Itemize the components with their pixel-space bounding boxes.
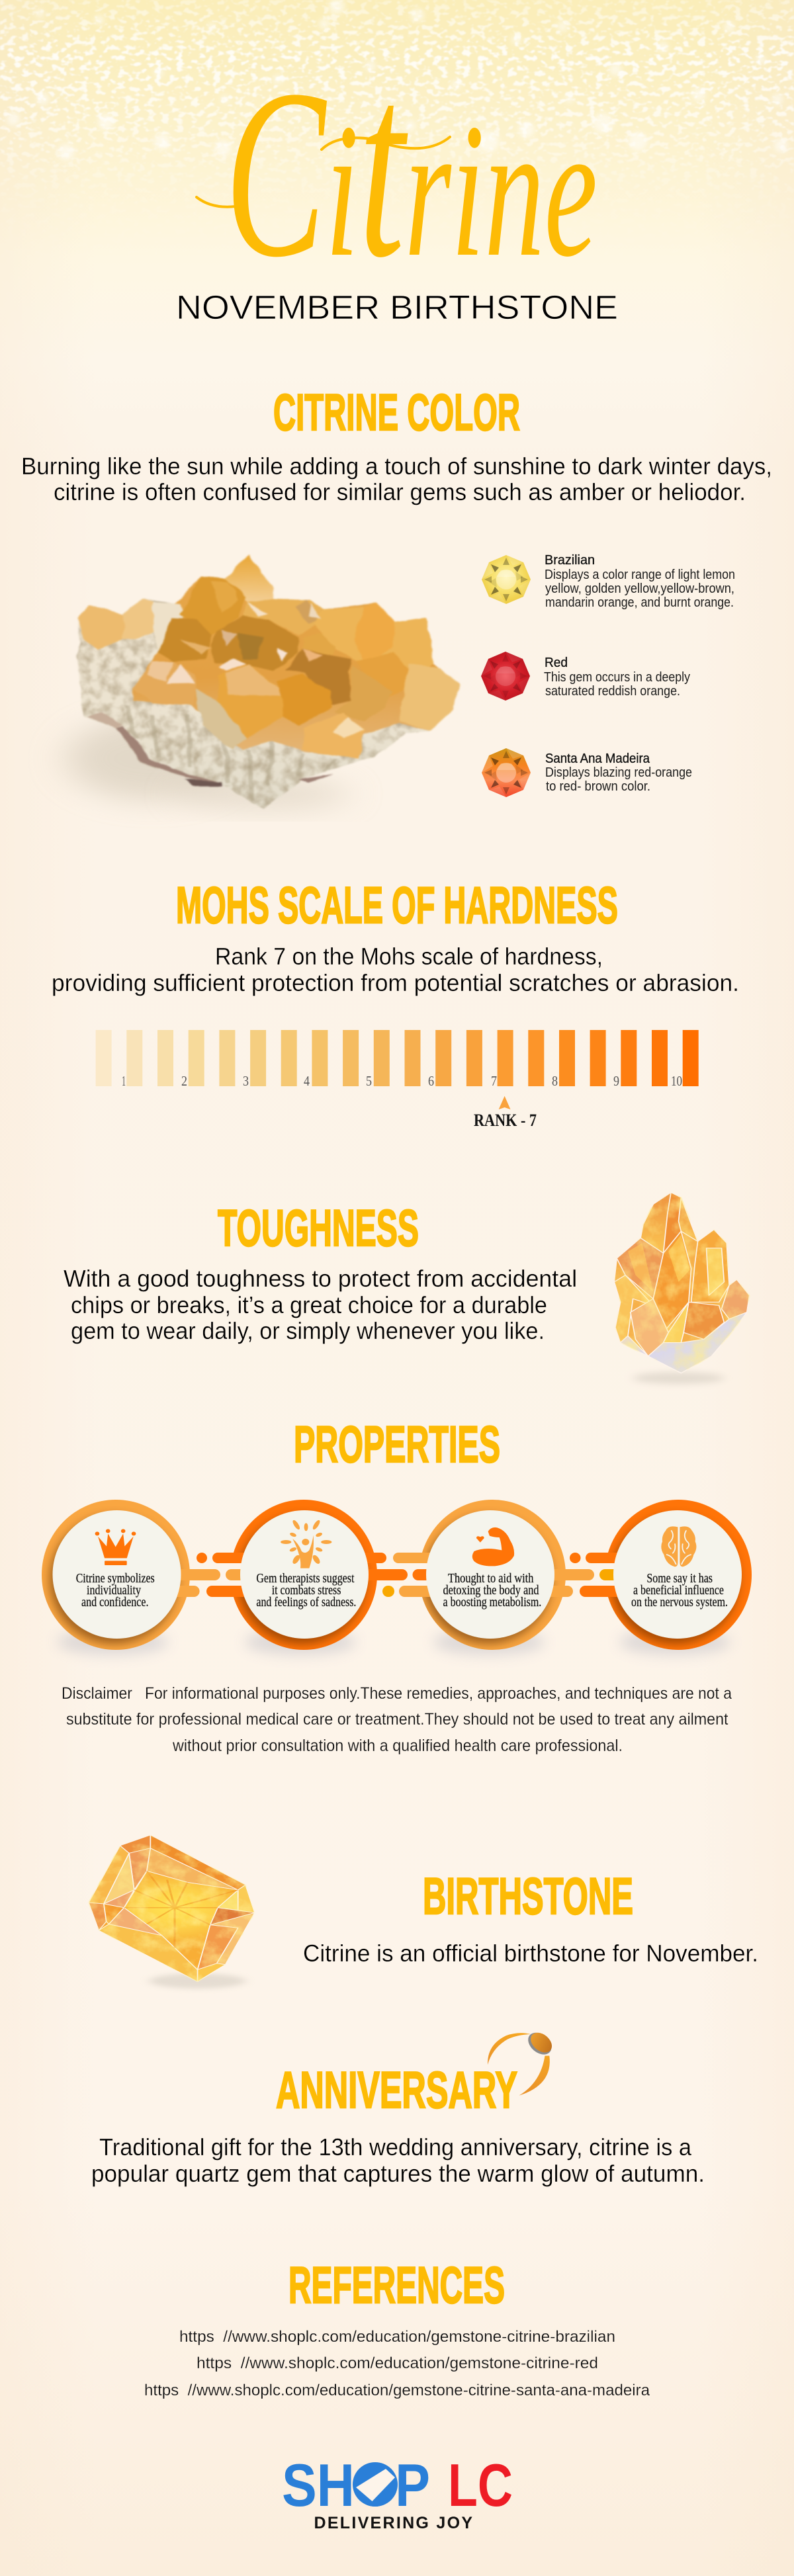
heading: references: REFERENCES xyxy=(288,2256,505,2314)
chart: mohs hardness scale bars: 3 xyxy=(243,1073,249,1089)
inner discs xyxy=(53,1510,742,1639)
diagram: properties circles xyxy=(42,1500,752,1655)
heading: birthstone: BIRTHSTONE xyxy=(423,1867,633,1925)
gem: brazilian xyxy=(482,555,531,604)
text: citrine intro xyxy=(21,452,772,505)
chart: mohs hardness scale bars xyxy=(96,1030,699,1089)
gem: santa ana madeira xyxy=(482,748,531,797)
text: santa ana madeira: Santa Ana Madeira xyxy=(545,751,650,766)
text: circle 2 xyxy=(256,1571,356,1610)
text: circle 4: a beneficial influence xyxy=(633,1583,724,1598)
icon: ring xyxy=(488,2032,556,2096)
logo: shop lc: SHOP xyxy=(282,2452,430,2519)
text: red: Red xyxy=(545,656,568,670)
drop shadows xyxy=(57,1629,730,1655)
text: circle 1: Citrine symbolizes xyxy=(76,1571,155,1586)
photo: citrine cluster xyxy=(66,554,459,809)
heading: toughness: TOUGHNESS xyxy=(218,1199,419,1257)
text: circle 3: Thought to aid with xyxy=(448,1571,533,1586)
text: brazilian: Displays a color range of light lemon xyxy=(545,568,735,582)
text: brazilian xyxy=(545,553,735,610)
text: reference links: https //www.shoplc.com/education/gemstone-citrine-santa-ana-madeira xyxy=(144,2382,650,2399)
text: citrine intro: citrine is often confused for similar gems such as amber or heliodor. xyxy=(54,478,746,505)
text: circle 2: Gem therapists suggest xyxy=(256,1571,355,1586)
heading: citrine color: CITRINE COLOR xyxy=(273,383,520,441)
logo: shop lc xyxy=(282,2452,513,2532)
chart: mohs hardness scale bars: 2 xyxy=(181,1073,187,1089)
text: disclaimer: substitute for professional medical care or treatment.They should not be used to treat any ailment xyxy=(66,1710,728,1729)
text: reference links xyxy=(144,2328,650,2399)
chart: mohs hardness scale bars: 1 xyxy=(122,1073,126,1089)
text: circle 3: a boosting metabolism. xyxy=(443,1595,541,1610)
text: toughness xyxy=(64,1265,577,1344)
text: circle 4 xyxy=(631,1571,728,1610)
chart: mohs hardness scale bars: 9 xyxy=(613,1073,619,1089)
text: mohs rank: providing sufficient protection from potential scratches or abrasion. xyxy=(52,969,739,996)
text: circle 3 xyxy=(443,1571,541,1610)
text: brazilian: Brazilian xyxy=(545,553,595,568)
text: brazilian: mandarin orange, and burnt orange. xyxy=(545,595,734,610)
text: circle 1: and confidence. xyxy=(81,1595,148,1610)
text: circle 2: it combats stress xyxy=(272,1583,341,1598)
text: birthstone: Citrine is an official birthstone for November. xyxy=(303,1940,758,1967)
text: mohs rank: Rank 7 on the Mohs scale of hardness, xyxy=(215,943,603,970)
text: citrine intro: Burning like the sun while adding a touch of sunshine to dark winter days, xyxy=(21,452,772,480)
subtitle: NOVEMBER BIRTHSTONE xyxy=(176,288,618,326)
text: anniversary: popular quartz gem that captures the warm glow of autumn. xyxy=(91,2160,705,2187)
text: reference links: https //www.shoplc.com/education/gemstone-citrine-red xyxy=(197,2354,598,2372)
icon: flexed arm and heart xyxy=(472,1527,514,1566)
text: mohs rank xyxy=(52,943,739,996)
ring shading xyxy=(50,1516,739,1644)
title: Citrine xyxy=(225,19,597,312)
text: circle 3: detoxing the body and xyxy=(443,1583,539,1598)
chart: mohs hardness scale bars: 4 xyxy=(304,1073,310,1089)
connectors between circles 2 and 3 xyxy=(357,1553,439,1597)
gem: red xyxy=(481,652,530,701)
text: red: saturated reddish orange. xyxy=(545,684,680,699)
connectors between circles 1 and 2 xyxy=(172,1553,253,1597)
chart: mohs hardness scale bars: 6 xyxy=(428,1073,434,1089)
logo: shop lc: DELIVERING JOY xyxy=(314,2514,472,2532)
text: reference links: https //www.shoplc.com/education/gemstone-citrine-brazilian xyxy=(179,2328,615,2346)
text: toughness: gem to wear daily, or simply whenever you like. xyxy=(71,1317,545,1344)
outer rings xyxy=(42,1500,752,1650)
chart: mohs hardness scale bars: 8 xyxy=(552,1073,558,1089)
label: rank 7: RANK - 7 xyxy=(474,1111,537,1130)
connectors between circles 3 and 4 xyxy=(543,1553,626,1597)
text: santa ana madeira xyxy=(545,751,692,794)
text: brazilian: yellow, golden yellow,yellow-brown, xyxy=(545,581,734,596)
text: circle 2: and feelings of sadness. xyxy=(256,1595,356,1610)
heading: anniversary: ANNIVERSARY xyxy=(276,2061,517,2119)
chart: mohs hardness scale bars: 7 xyxy=(491,1073,497,1089)
glitter bokeh header xyxy=(0,0,794,182)
text: circle 4: Some say it has xyxy=(646,1571,713,1586)
illustration: faceted gem xyxy=(89,1835,255,1989)
text: santa ana madeira: Displays blazing red-orange xyxy=(545,765,692,780)
chart: mohs hardness scale bars: 5 xyxy=(366,1073,372,1089)
text: circle 1 xyxy=(76,1571,155,1610)
icon: tree person xyxy=(281,1520,331,1568)
logo: shop lc: LC xyxy=(448,2452,513,2519)
text: toughness: With a good toughness to protect from accidental xyxy=(64,1265,577,1292)
heading: properties: PROPERTIES xyxy=(294,1415,500,1473)
text: toughness: chips or breaks, it’s a great choice for a durable xyxy=(71,1291,547,1318)
text: anniversary xyxy=(91,2133,705,2187)
text: disclaimer xyxy=(62,1684,732,1755)
text: circle 4: on the nervous system. xyxy=(631,1595,728,1610)
icon: brain xyxy=(661,1526,696,1567)
text: circle 1: individuality xyxy=(87,1583,141,1598)
text: red xyxy=(544,656,690,699)
text: disclaimer: without prior consultation with a qualified health care professional. xyxy=(172,1737,623,1755)
arrow: rank marker xyxy=(499,1096,511,1109)
connector gaps xyxy=(222,1563,618,1586)
text: anniversary: Traditional gift for the 13th wedding anniversary, citrine is a xyxy=(99,2133,692,2161)
illustration: watercolor crystal xyxy=(614,1193,750,1384)
text: disclaimer: Disclaimer For informational purposes only.These remedies, approaches, and techniques are not a xyxy=(62,1684,732,1703)
icon: crown xyxy=(95,1529,136,1565)
text: santa ana madeira: to red- brown color. xyxy=(546,779,650,794)
chart: mohs hardness scale bars: 10 xyxy=(671,1073,682,1089)
text: red: This gem occurs in a deeply xyxy=(544,670,690,685)
